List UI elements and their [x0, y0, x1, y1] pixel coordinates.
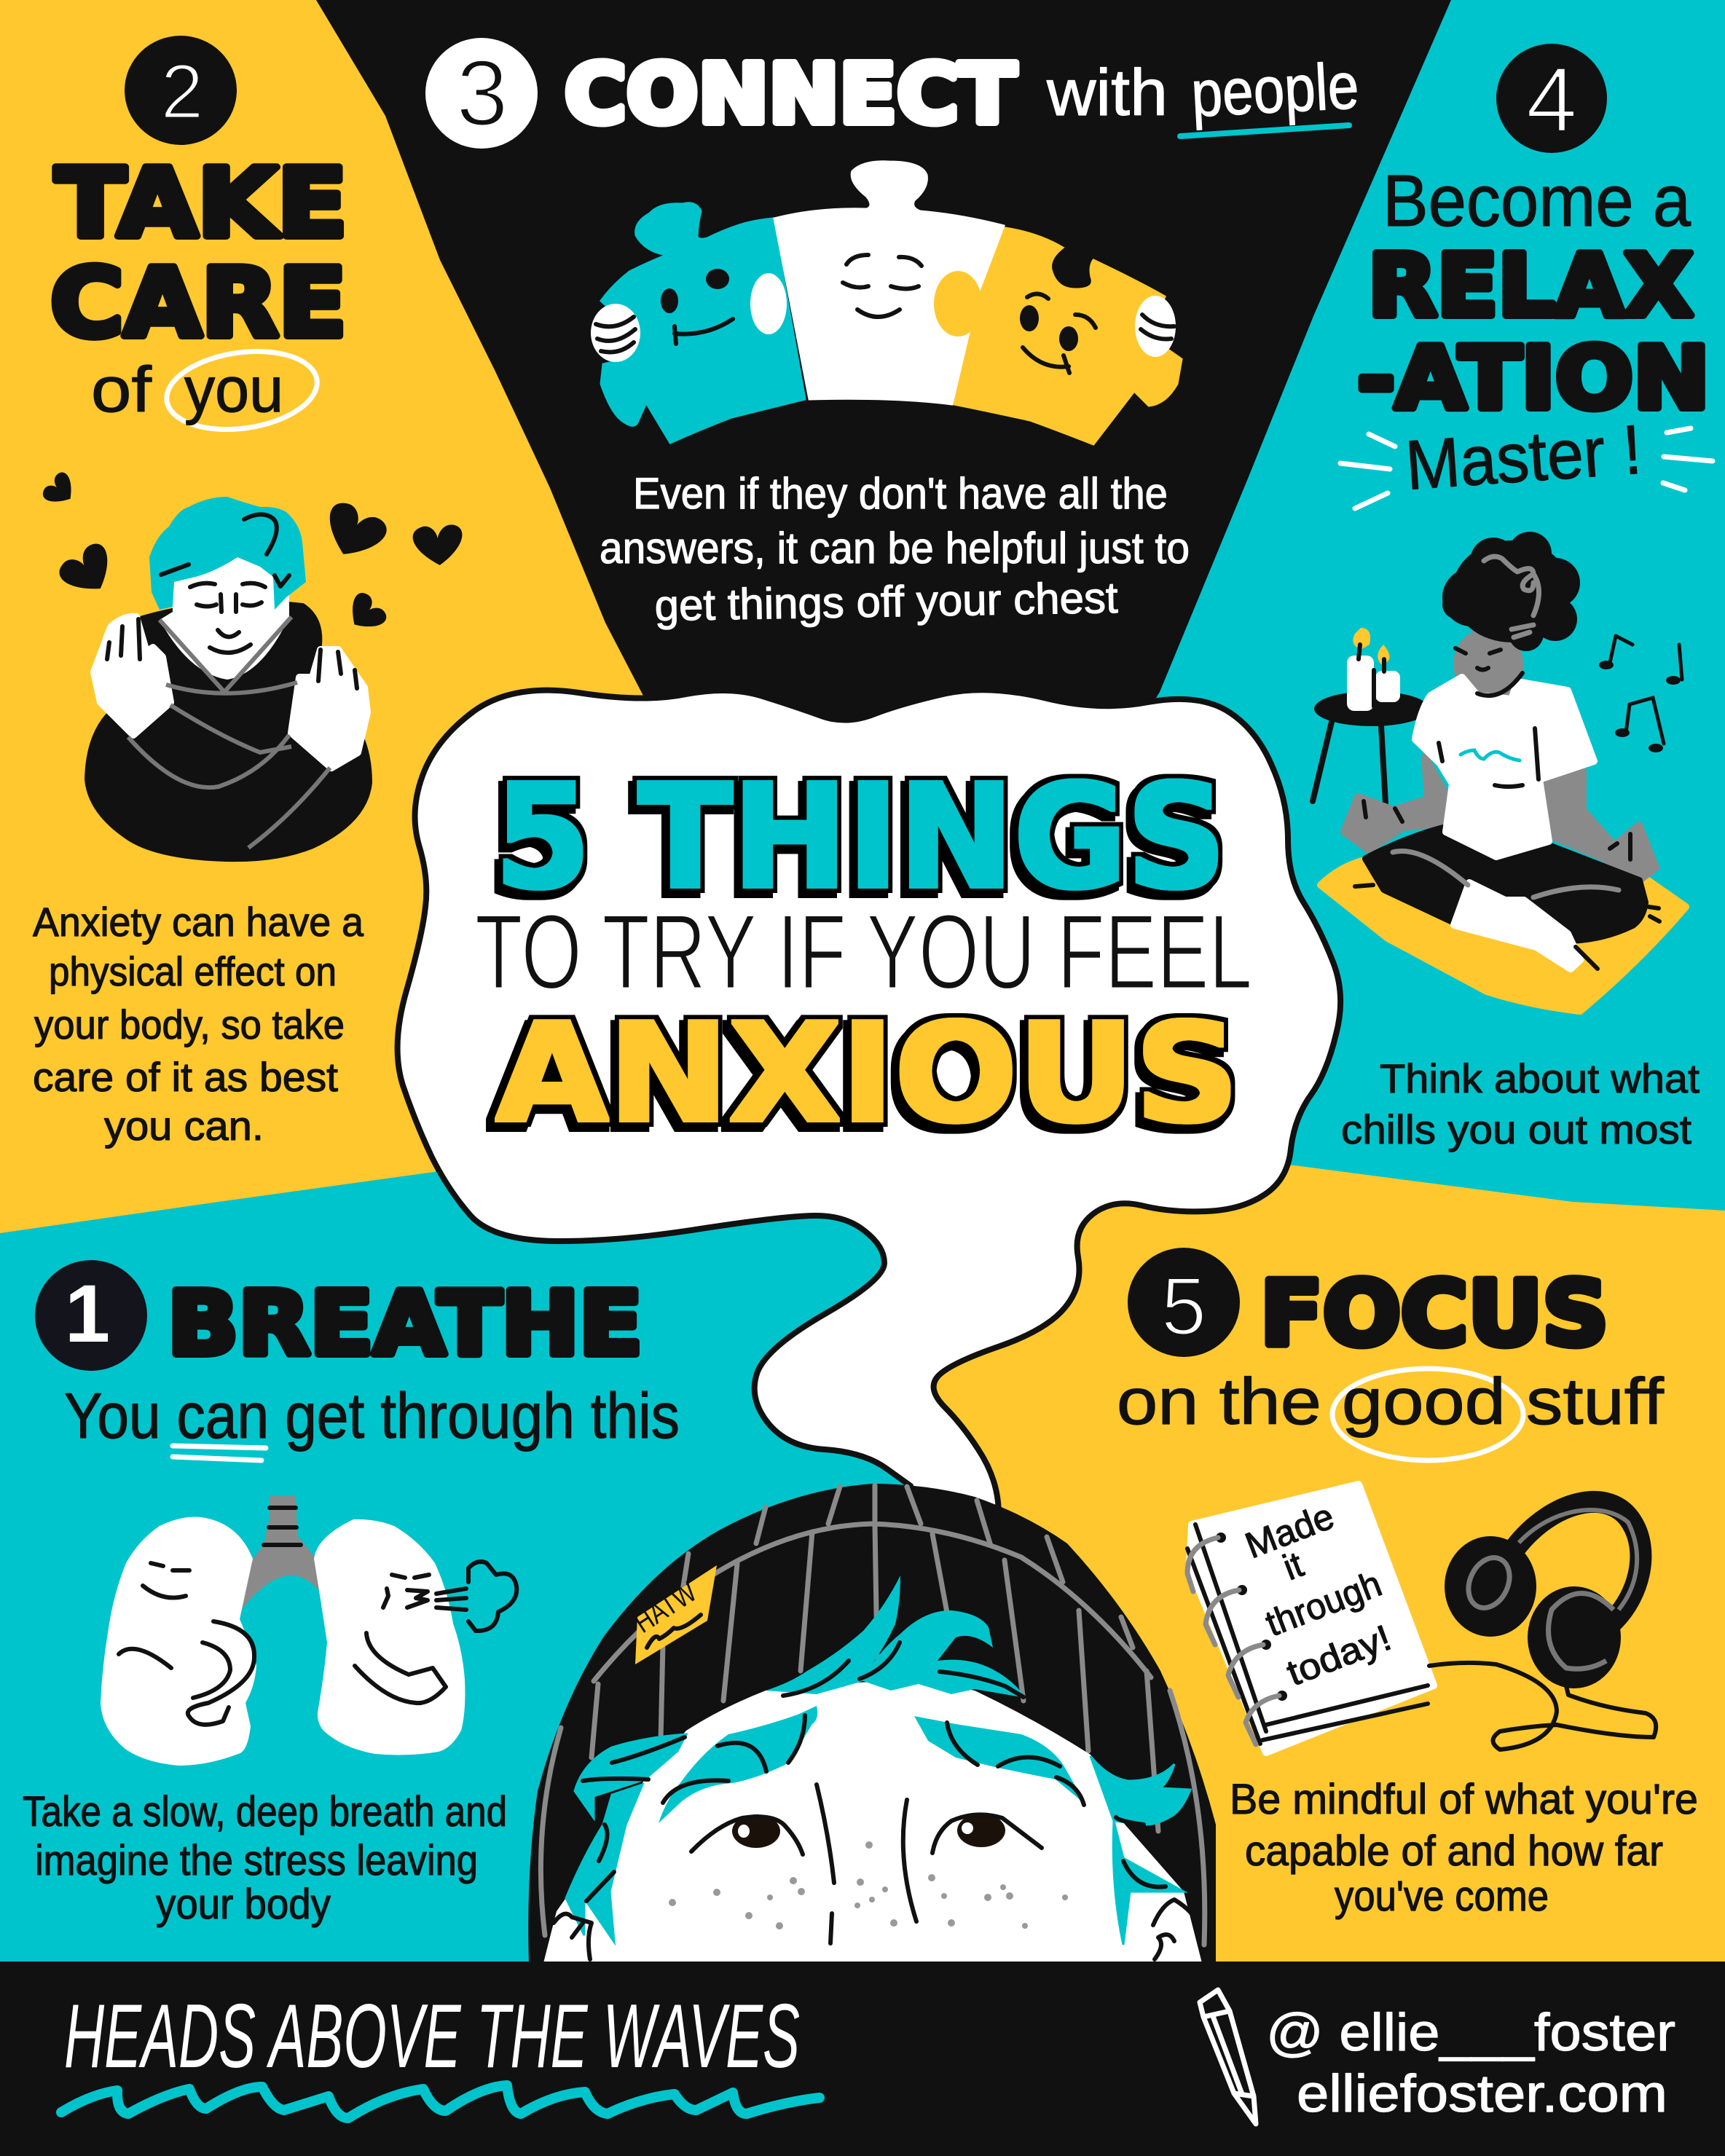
footer wave: [61, 2085, 820, 2118]
main title: [475, 755, 1252, 1152]
thought cloud with smoke trail: [398, 690, 1340, 1530]
freckles: [669, 1841, 1068, 1929]
icon: hearts: [40, 469, 465, 638]
icon: note heads: [1599, 661, 1681, 752]
number badge 2: 2: [161, 49, 203, 135]
illustration: meditating woman: [1313, 532, 1686, 1011]
hair: [1442, 532, 1580, 651]
heading: BREATHE: BREATHE: [168, 1274, 643, 1375]
footer bar: [0, 1962, 1725, 2156]
text: connect body copy: Even if they don't have all the: [633, 469, 1168, 518]
subheading: you can get through this: You can get through this: [64, 1380, 680, 1452]
footer handles: @ ellie___foster: [1266, 2004, 1675, 2062]
panel: 2 take care of you: [33, 36, 465, 1149]
footer handles: [1266, 2004, 1675, 2123]
background: black top wedge panel: [316, 0, 1451, 801]
heading: TAKE CARE: CARE: [50, 248, 347, 358]
icon: music notes: [1610, 636, 1682, 744]
puzzle piece: yellow: [954, 228, 1182, 444]
number badge 5: 5: [1161, 1261, 1206, 1352]
text: anxiety body copy: you can.: [104, 1103, 264, 1149]
notebook text: today!: [1281, 1617, 1396, 1693]
number badge 2: [125, 36, 237, 145]
number badge 1: 1: [65, 1268, 110, 1359]
heading: RELAX-ATION: [1357, 235, 1710, 428]
subheading: with people: with: [1046, 57, 1168, 130]
subheading: of you: [91, 342, 322, 438]
heading: FOCUS: FOCUS: [1260, 1262, 1608, 1366]
text: focus body copy: you've come: [1335, 1873, 1549, 1920]
text: focus body copy: Be mindful of what you're: [1230, 1776, 1698, 1823]
subheading: on the good stuff: [1117, 1366, 1665, 1460]
title: ANXIOUS: ANXIOUS: [496, 994, 1239, 1152]
background: yellow top-left panel: [0, 0, 728, 1233]
text: anxiety body copy: Anxiety can have a: [33, 899, 364, 945]
notebook text: [1240, 1495, 1396, 1693]
number badge 3: [425, 38, 538, 149]
subheading: with people: [1046, 50, 1361, 136]
hair: right side: [1091, 1756, 1190, 1945]
illustration: headphones: [1429, 1502, 1656, 1750]
notebook text: Made: [1240, 1495, 1340, 1566]
text: connect body copy: get things off your chest: [654, 573, 1118, 630]
number badge 3: 3: [456, 42, 508, 146]
text: focus body copy: capable of and how far: [1245, 1828, 1663, 1875]
nose lines: [817, 1785, 916, 1943]
text: relax body copy: [1341, 1055, 1700, 1152]
text: anxiety body copy: [33, 899, 364, 1149]
illustration: person hugging self: [85, 497, 372, 862]
panel: 5 focus: [1117, 1248, 1698, 1920]
heading: CONNECT: CONNECT: [565, 47, 1016, 142]
panel: 4 become a relaxation master: [1313, 44, 1713, 1152]
left lung: [101, 1516, 256, 1766]
illustration: notebook: [1187, 1484, 1434, 1752]
icon: pencil: [1200, 1990, 1256, 2124]
hair: right fringe: [914, 1716, 1086, 1805]
text: anxiety body copy: care of it as best: [33, 1054, 338, 1100]
number badge 4: [1496, 44, 1607, 153]
icon: double underline: [173, 1446, 266, 1460]
text: focus body copy: [1230, 1776, 1698, 1920]
text: breathe body copy: [23, 1788, 507, 1928]
text: breathe body copy: imagine the stress leaving: [35, 1837, 478, 1884]
text: connect body copy: [600, 469, 1190, 630]
footer brand: heads above the waves: HEADS ABOVE THE WAVES: [64, 1986, 800, 2087]
hair: left side: [566, 1734, 686, 1942]
heading: TAKE CARE: [50, 148, 347, 358]
illustration: lungs: [101, 1496, 516, 1766]
illustration: three puzzle pieces hugging: [591, 162, 1182, 444]
illustration: character head with beanie: [528, 1484, 1216, 1963]
text: relax body copy: chills you out most: [1341, 1106, 1691, 1152]
text: anxiety body copy: your body, so take: [34, 1002, 345, 1047]
puzzle piece: teal: [601, 203, 805, 443]
right lung: [314, 1519, 465, 1755]
icon: emphasis rays: [1340, 428, 1713, 508]
hair: top quiff: [766, 1575, 1026, 1698]
number badge 1: [35, 1260, 147, 1371]
puzzle piece: white: [774, 162, 1004, 404]
number badge 5: [1128, 1248, 1240, 1357]
subheading: become a: Become a: [1383, 160, 1691, 242]
subheading: of you: you: [184, 353, 283, 425]
title: 5 THINGS: 5 THINGS: [495, 755, 1226, 921]
hair: left fringe: [659, 1706, 817, 1823]
heading: RELAX-ATION: -ATION: [1357, 328, 1710, 428]
panel: 1 breathe: [23, 1260, 680, 1928]
subheading: with people: people: [1190, 50, 1361, 131]
text: breathe body copy: Take a slow, deep breath and: [23, 1788, 507, 1836]
heading: TAKE CARE: TAKE: [55, 148, 347, 259]
subheading: master: Master !: [1403, 411, 1644, 505]
subheading: of you: of: [91, 353, 152, 425]
heading: RELAX-ATION: RELAX: [1368, 235, 1693, 336]
panel: 3 connect with people: [425, 38, 1361, 630]
subheading: on the good stuff: on the good stuff: [1117, 1366, 1665, 1439]
text: anxiety body copy: physical effect on: [49, 948, 337, 994]
title: to try if you feel: TO TRY IF YOU FEEL: [475, 892, 1252, 1011]
trachea: [240, 1496, 320, 1612]
side table with candles: [1313, 628, 1429, 803]
background: yellow bottom-right panel: [838, 1162, 1725, 1967]
face: [543, 1682, 1202, 1963]
text: relax body copy: Think about what: [1380, 1055, 1700, 1101]
hair line details: [583, 1642, 1166, 1901]
text: breathe body copy: your body: [156, 1881, 331, 1928]
ears: [554, 1900, 1198, 1959]
eyes: [691, 1814, 1042, 1854]
number badge 4: 4: [1526, 48, 1577, 151]
beanie ribs: [541, 1485, 1205, 1945]
notebook text: it: [1278, 1543, 1308, 1588]
text: connect body copy: answers, it can be helpful just to: [600, 524, 1190, 573]
beanie and head silhouette: [528, 1484, 1216, 1963]
notebook text: through: [1260, 1563, 1387, 1644]
hat badge HATW: HATW: [629, 1575, 702, 1640]
footer handles: elliefoster.com: [1297, 2065, 1667, 2123]
